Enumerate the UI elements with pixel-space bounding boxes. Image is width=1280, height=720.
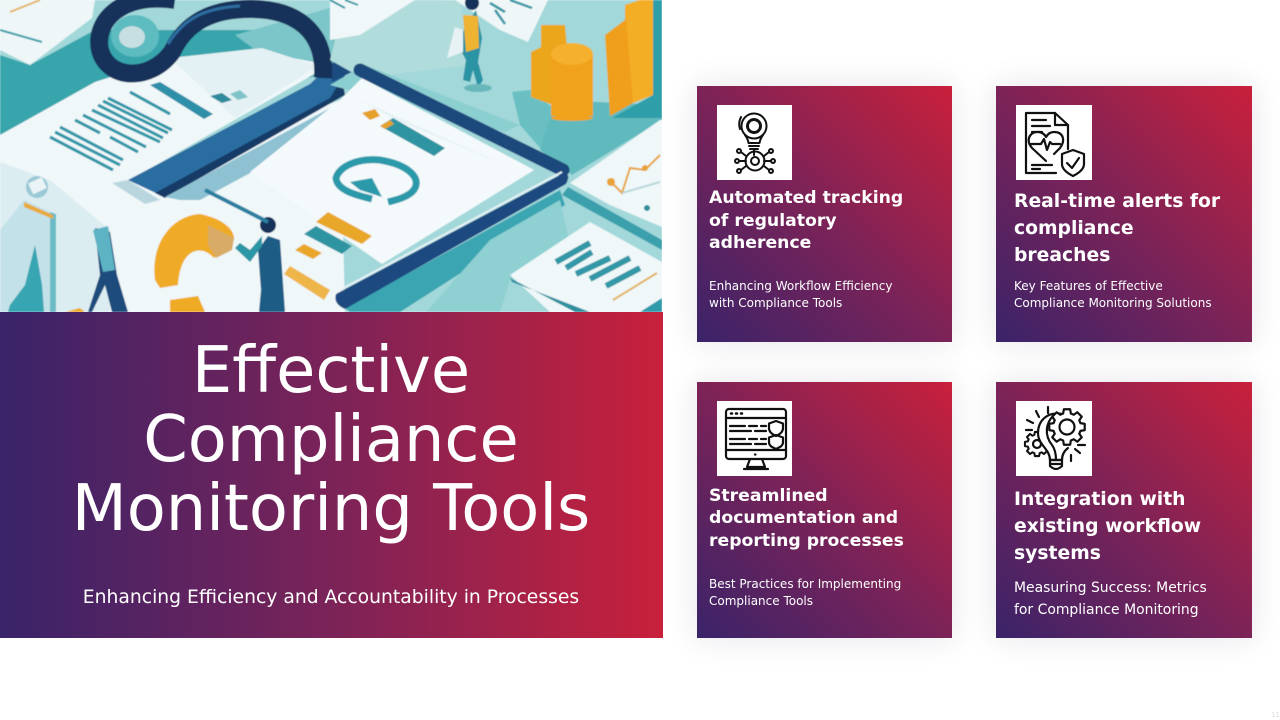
heading [709,188,903,253]
description: Key Features of Effective [1014,279,1163,293]
description [1014,279,1212,310]
icon: monitor with shields [716,401,792,476]
icon: light bulb with gear and circuit [716,105,792,180]
description: Best Practices for Implementing [709,577,901,591]
main title: Monitoring Tools [72,472,590,546]
icon: bulb with gears [1016,401,1092,476]
heading: adherence [709,233,811,253]
heading: documentation and [709,508,898,528]
heading [709,486,904,550]
description: with Compliance Tools [709,296,842,310]
heading: Automated tracking [709,188,903,208]
main title: Effective [192,334,470,408]
card: real-time alerts [996,86,1252,342]
heading: existing workflow [1014,516,1201,536]
description: Compliance Monitoring Solutions [1014,296,1212,310]
main title: Compliance [143,403,519,477]
heading: breaches [1014,245,1110,266]
heading: compliance [1014,218,1134,239]
description: for Compliance Monitoring [1014,602,1199,618]
description: Enhancing Workflow Efficiency [709,279,892,293]
heading: Integration with [1014,488,1186,510]
card: automated tracking [697,86,952,342]
hero illustration: isometric compliance documents [0,0,662,312]
heading: Streamlined [709,486,828,506]
description: Measuring Success: Metrics [1014,580,1207,596]
title band [0,312,663,638]
description [709,577,901,608]
main title [72,334,590,546]
heading: systems [1014,542,1101,564]
description: Compliance Tools [709,594,813,608]
heading: Real-time alerts for [1014,191,1220,212]
card: streamlined documentation [697,382,952,638]
description [1014,580,1207,618]
card: workflow integration [996,382,1252,638]
page number: 11 [1271,711,1280,719]
heading: reporting processes [709,530,904,550]
subtitle: Enhancing Efficiency and Accountability in Processes [83,587,579,608]
description [709,279,892,310]
icon: medical document with shield [1016,105,1092,180]
heading [1014,191,1220,266]
heading: of regulatory [709,210,837,230]
heading [1014,488,1201,564]
